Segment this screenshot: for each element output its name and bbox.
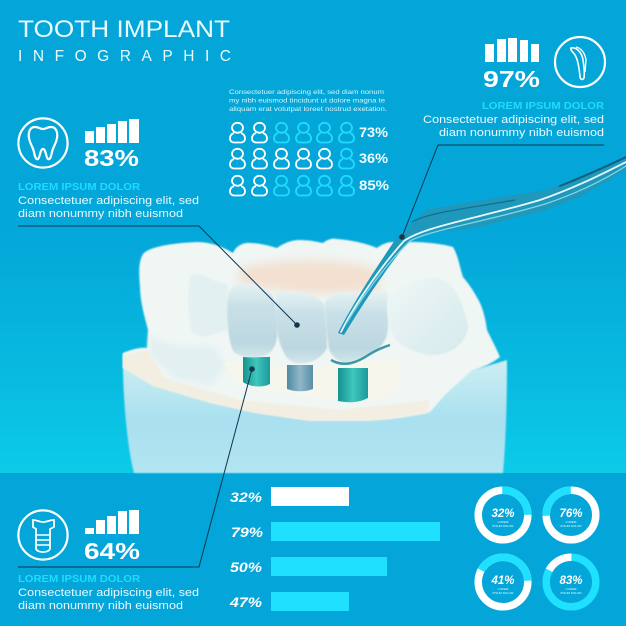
paragraph: aliquam erat volutpat loreet nostrud exetation. [229, 106, 387, 113]
implant middle [287, 365, 313, 391]
row 2 [230, 149, 354, 168]
heading: LOREM IPSUM DOLOR [18, 181, 140, 193]
jaw base block [123, 353, 507, 473]
donut 41%: IPSUM DOLOR [492, 591, 514, 595]
row values: 73% [359, 124, 389, 140]
donut 76%: IPSUM DOLOR [560, 524, 582, 528]
bar labels: 79% [231, 525, 263, 540]
donut 83%: 83% [559, 575, 583, 587]
description: Consectetuer adipiscing elit, sed [18, 195, 199, 207]
heading: LOREM IPSUM DOLOR [482, 100, 604, 112]
donut charts [469, 490, 605, 616]
description: Consectetuer adipiscing elit, sed [18, 587, 199, 599]
donut 76%: LOREM [566, 520, 577, 524]
donut 76% [546, 490, 596, 540]
percentage: 97% [483, 66, 540, 92]
donut 76%: 76% [559, 508, 583, 520]
bars [271, 487, 440, 611]
jaw and gum silhouette [123, 239, 500, 420]
donut 41%: LOREM [498, 587, 509, 591]
block: 83% stat [18, 118, 199, 220]
donut 83% [537, 548, 605, 616]
donut 32%: LOREM [498, 520, 509, 524]
donut 32% [478, 490, 528, 540]
paragraph: Consectetuer adipiscing elit, sed diam nonum [229, 89, 384, 96]
donut 41% [469, 548, 537, 616]
block: 64% stat [18, 510, 199, 612]
bottom band [0, 473, 626, 626]
photo: dental implant model [123, 157, 626, 473]
row 3 [230, 176, 354, 196]
left back tooth shading [188, 274, 228, 337]
title: TOOTH IMPLANT [18, 16, 230, 43]
icon: tooth [18, 118, 68, 168]
icon: dental tweezers [555, 37, 605, 87]
row values: 36% [359, 150, 389, 166]
percentage: 83% [84, 145, 139, 171]
signal bars [85, 510, 139, 534]
crown left [227, 283, 277, 357]
left gum shading [150, 335, 226, 385]
gum shelf front [123, 350, 430, 421]
bar labels: 32% [230, 490, 262, 505]
subtitle: INFOGRAPHIC [18, 48, 231, 65]
percentage: 64% [84, 538, 140, 564]
background [0, 0, 626, 473]
warm inner shading [238, 261, 380, 294]
crown right [325, 292, 388, 363]
row 1 [230, 123, 354, 142]
gum floor around implants [222, 360, 400, 402]
crown middle [276, 291, 327, 363]
bar chart [229, 487, 440, 611]
bar labels: 50% [230, 560, 262, 575]
large molar [387, 278, 468, 355]
leader line to implant [18, 366, 255, 567]
row values [359, 124, 390, 193]
description: Consectetuer adipiscing elit, sed [423, 114, 604, 126]
implant right [338, 368, 368, 402]
donut 83%: LOREM [566, 587, 577, 591]
description: diam nonummy nibh euismod [18, 600, 183, 612]
description: diam nonummy nibh euismod [18, 208, 183, 220]
heading: LOREM IPSUM DOLOR [18, 573, 140, 585]
bar labels: 47% [229, 595, 262, 610]
bar labels [229, 490, 263, 610]
signal bars [85, 119, 139, 143]
paragraph: my nibh euismod tincidunt ut dolore magna te [229, 98, 386, 104]
donut 41%: 41% [490, 575, 515, 587]
title [18, 16, 231, 65]
description: diam nonummy nibh euismod [439, 127, 604, 139]
signal bars [485, 38, 539, 62]
implant left [243, 357, 270, 386]
tweezers [338, 157, 626, 335]
block: 97% stat [423, 37, 605, 139]
row values: 85% [359, 177, 390, 193]
leader line to crown [18, 226, 300, 328]
donut 83%: IPSUM DOLOR [560, 591, 582, 595]
leader line to tweezers [399, 145, 604, 240]
donut 32%: IPSUM DOLOR [492, 524, 514, 528]
people chart [230, 123, 390, 196]
crown margin [331, 345, 390, 364]
icon: implant screw [18, 510, 68, 560]
donut 32%: 32% [491, 508, 515, 520]
